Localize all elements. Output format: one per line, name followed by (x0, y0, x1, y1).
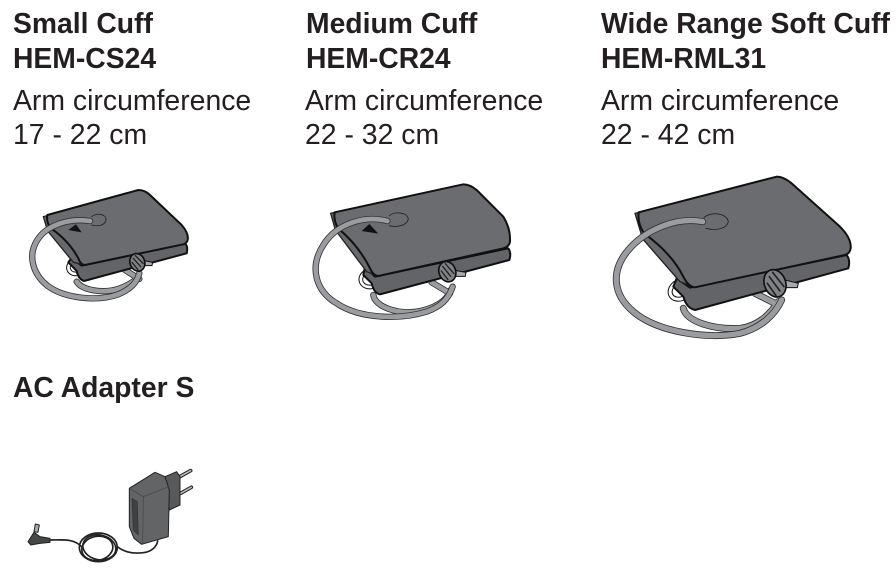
text block: small cuff: 17 - 22 cm (13, 119, 147, 151)
text block: medium cuff (305, 7, 543, 151)
text block: small cuff (13, 7, 251, 151)
text block: small cuff: Small Cuff (13, 7, 154, 39)
text block: wide range soft cuff: 22 - 42 cm (601, 119, 735, 151)
text block: small cuff: HEM-CS24 (13, 42, 156, 74)
heading: AC adapter: AC Adapter S (13, 371, 194, 403)
text block: wide range soft cuff: Arm circumference (601, 85, 839, 117)
text block: medium cuff: 22 - 32 cm (305, 119, 439, 151)
text block: medium cuff: Medium Cuff (306, 7, 478, 39)
text block: medium cuff: Arm circumference (305, 85, 543, 117)
icon: AC adapter (28, 471, 191, 563)
text block: wide range soft cuff: HEM-RML31 (601, 42, 766, 74)
text block: wide range soft cuff (601, 7, 891, 151)
icon: wide range soft cuff (616, 177, 851, 336)
icon: small cuff (32, 190, 188, 298)
icon: medium cuff (316, 184, 510, 317)
text block: small cuff: Arm circumference (13, 85, 251, 117)
text block: wide range soft cuff: Wide Range Soft Cuff (601, 7, 891, 39)
text block: medium cuff: HEM-CR24 (306, 42, 451, 74)
